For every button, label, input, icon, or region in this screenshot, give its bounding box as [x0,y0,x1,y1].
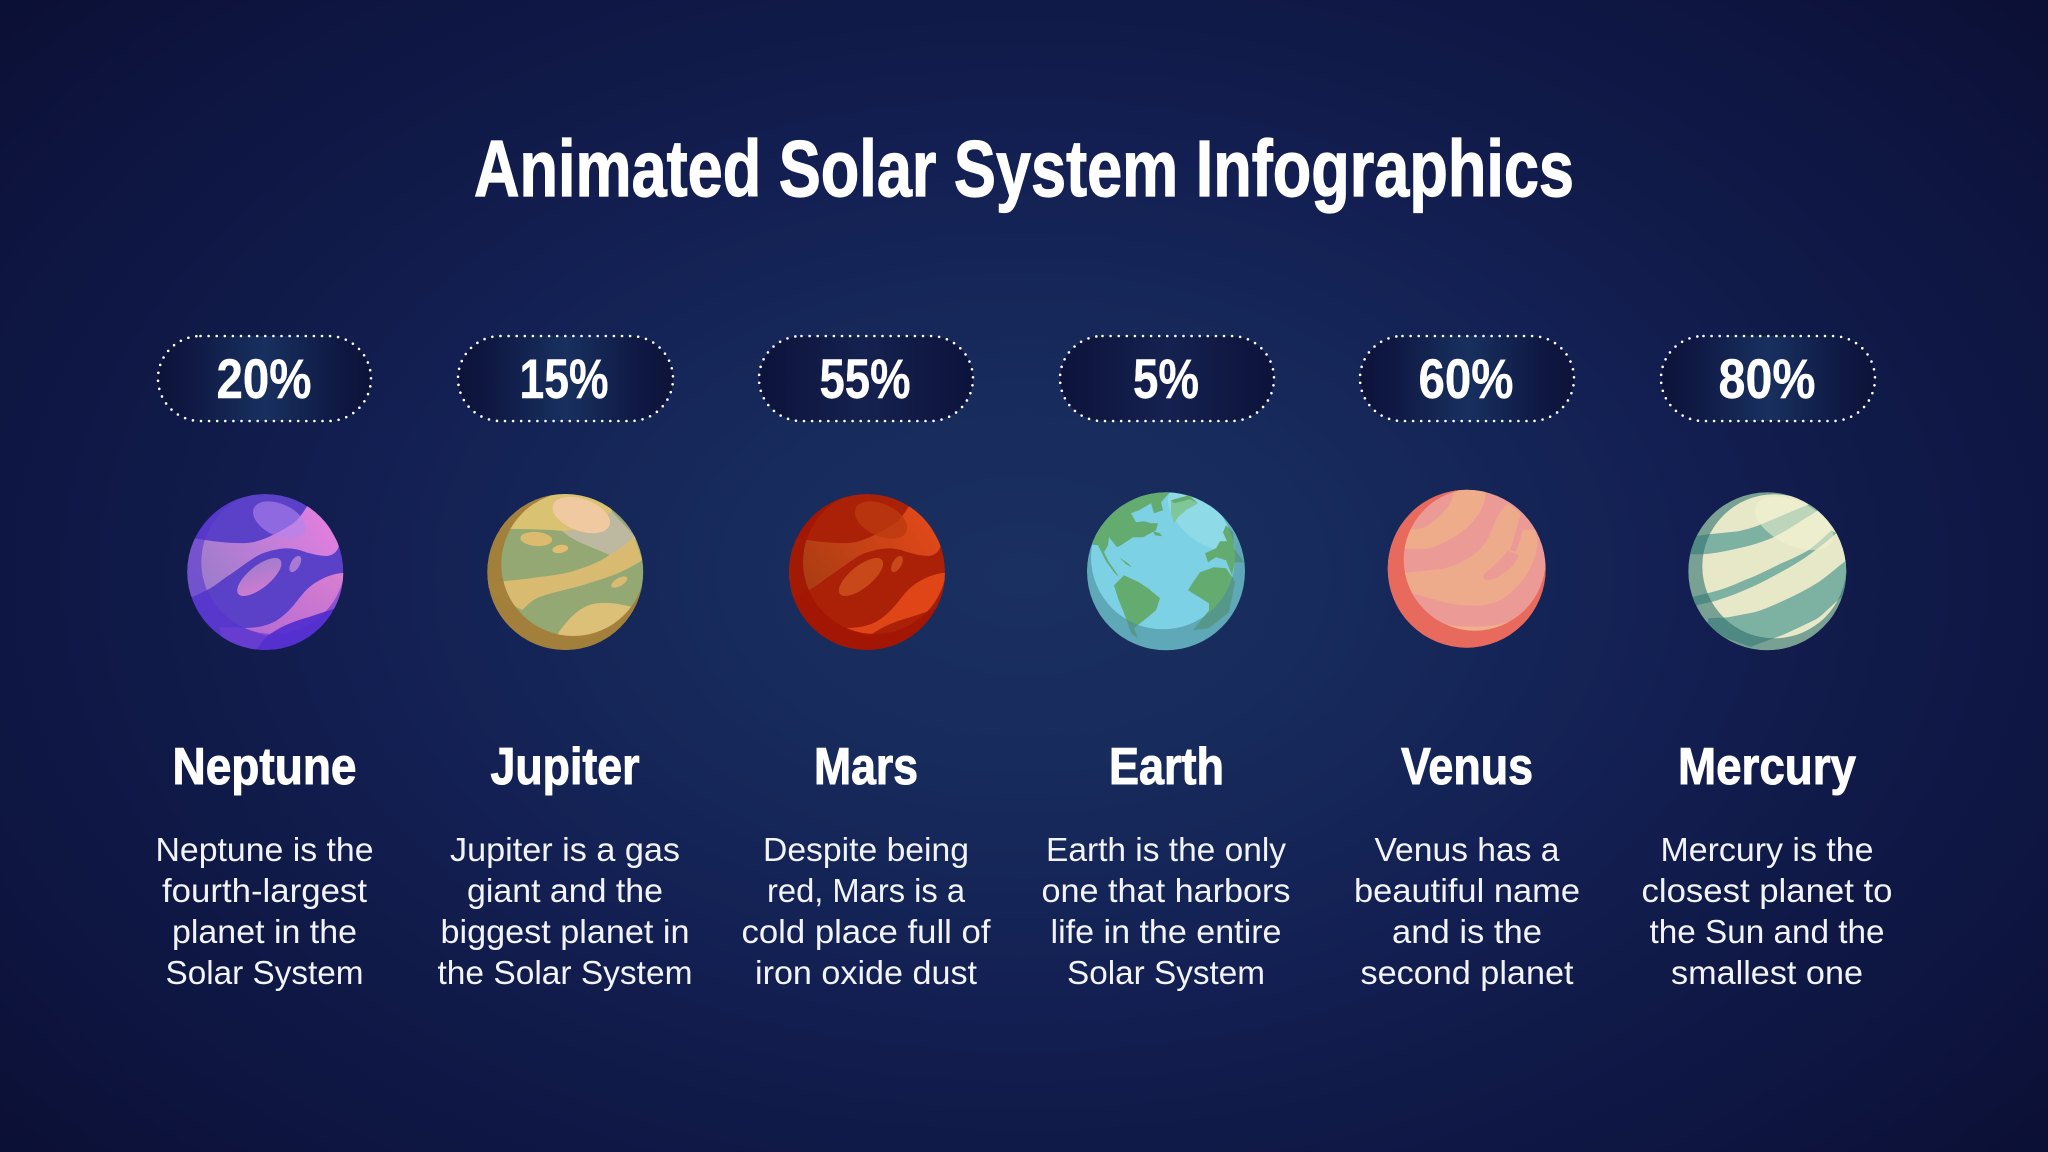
description: Venus: and is the [1392,913,1542,950]
description: Mercury: the Sun and the [1650,913,1884,950]
planet icon: Mars [785,490,949,652]
planet name: Earth: Earth [1109,738,1224,796]
planet name: Mercury: Mercury [1678,738,1856,796]
planet icon: Jupiter [485,487,645,652]
description: Earth: one that harbors [1042,872,1290,909]
description: Neptune: fourth-largest [162,872,367,909]
percentage pill: 5% [1060,336,1274,421]
planet icon: Neptune [183,490,347,652]
column: Venus [1354,336,1580,991]
planet name: Jupiter: Jupiter [490,738,640,796]
percentage pill: 60% [1360,336,1574,421]
description: Mercury: closest planet to [1642,872,1892,909]
planet name: Mars: Mars [814,738,918,796]
description: Jupiter [438,831,692,991]
description: Venus: Venus has a [1374,831,1560,868]
column: Jupiter [438,336,692,991]
description: Earth: life in the entire [1050,913,1282,950]
description: Venus: beautiful name [1354,872,1580,909]
planet name: Venus: Venus [1401,738,1533,796]
column: Mercury [1642,336,1892,991]
description: Earth: Earth is the only [1046,831,1287,868]
percentage pill: 5%: 5% [1133,347,1199,410]
description: Neptune: Neptune is the [156,831,374,868]
percentage pill: 20%: 20% [216,347,312,410]
description: Mars: cold place full of [742,913,991,950]
description: Jupiter: biggest planet in [440,913,690,950]
percentage pill: 80% [1661,336,1875,421]
percentage pill: 15% [458,336,673,421]
planet icon: Mercury [1686,486,1851,652]
planet icon: Venus [1386,488,1548,650]
percentage pill: 55% [759,336,973,421]
percentage pill: 15%: 15% [520,347,608,410]
description: Mars: red, Mars is a [767,872,966,909]
column: Mars [742,336,991,991]
description: Jupiter: Jupiter is a gas [450,831,680,868]
description: Jupiter: giant and the [467,872,663,909]
title: Animated Solar System Infographics [474,124,1574,213]
description: Mercury [1642,831,1892,991]
description: Mars [742,831,991,991]
description: Venus: second planet [1360,954,1574,991]
percentage pill: 60%: 60% [1418,347,1514,410]
column: Neptune [156,336,374,991]
column: Earth [1042,336,1290,991]
description: Venus [1354,831,1580,991]
percentage pill: 55%: 55% [820,347,910,410]
description: Earth [1042,831,1290,991]
description: Mercury: Mercury is the [1660,831,1874,868]
planet icon: Earth [1087,492,1245,650]
description: Mars: iron oxide dust [755,954,977,991]
description: Earth: Solar System [1067,954,1265,991]
description: Neptune: Solar System [166,954,364,991]
percentage pill: 80%: 80% [1718,347,1816,410]
description: Neptune [156,831,374,991]
description: Mercury: smallest one [1671,954,1863,991]
description: Jupiter: the Solar System [438,954,692,991]
description: Mars: Despite being [763,831,969,868]
percentage pill: 20% [158,336,371,421]
planet name: Neptune: Neptune [172,738,356,796]
description: Neptune: planet in the [172,913,357,950]
